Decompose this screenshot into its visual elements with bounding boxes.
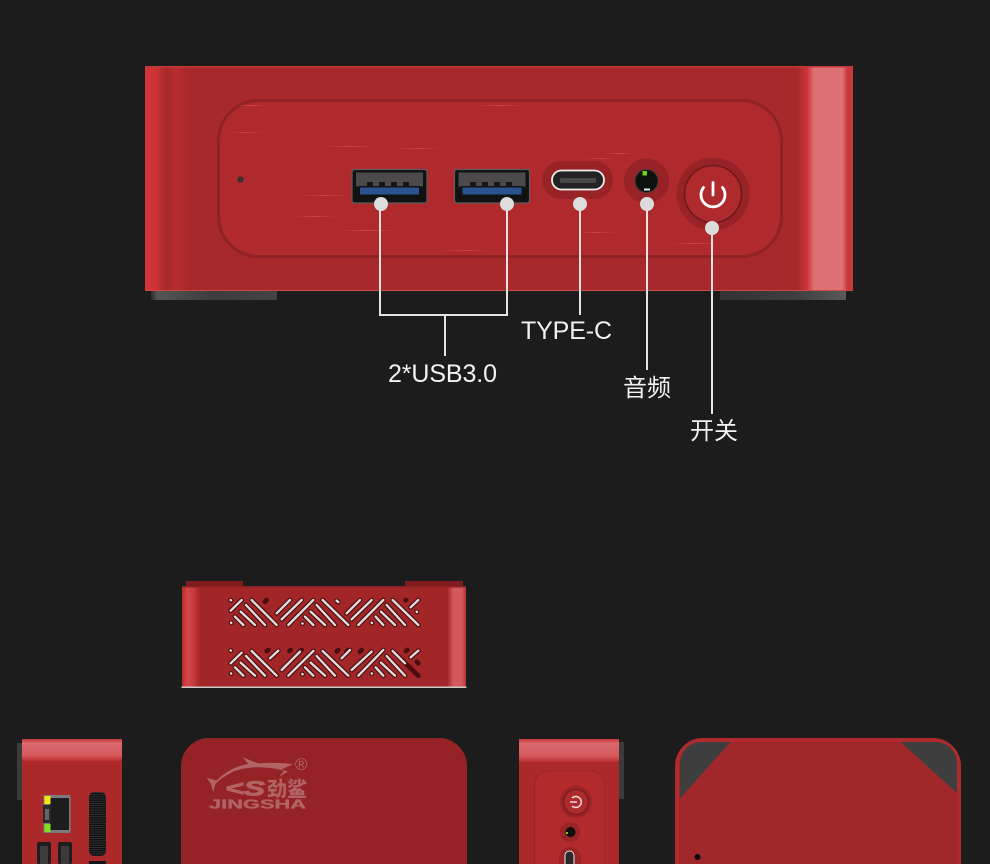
top bumps	[186, 581, 463, 587]
rubber pad right	[900, 742, 957, 793]
panel: logo face	[181, 738, 467, 864]
vent row 1	[231, 600, 418, 625]
icon: power button	[560, 786, 592, 818]
label: USB: 2*USB3.0	[388, 360, 497, 388]
logo letters: <S	[225, 778, 265, 800]
vent slots	[231, 600, 418, 676]
callout dots	[374, 197, 719, 235]
feet: front view	[151, 291, 846, 300]
callout line: audio	[646, 204, 648, 370]
registered mark: ®	[295, 755, 308, 774]
panel: top view with vents	[182, 581, 466, 688]
icon: Type-C port	[542, 161, 613, 199]
indicator hole	[237, 176, 244, 183]
recessed front panel	[218, 100, 782, 256]
icon: shark	[207, 757, 293, 792]
icon: USB port 1	[352, 170, 427, 203]
label: Type-C: TYPE-C	[521, 317, 612, 345]
callout line: Type-C	[579, 204, 581, 315]
panel: right side view	[519, 739, 624, 864]
icon: USB port 2	[454, 170, 530, 203]
icon: audio jack	[624, 158, 669, 204]
vent row 2	[231, 650, 418, 676]
icon: USB ports	[37, 842, 72, 864]
screw hole	[694, 854, 700, 860]
icon: Type-C port	[559, 847, 581, 864]
rubber pad left	[680, 742, 730, 798]
panel: left side view	[17, 739, 122, 864]
panel: bottom view	[677, 740, 959, 864]
callout line: power	[711, 228, 713, 414]
vent strip	[89, 792, 106, 856]
recessed panel	[534, 771, 604, 864]
callout lines: USB bracket	[380, 204, 507, 356]
icon: ethernet port	[43, 795, 70, 833]
logo: JINGSHA	[207, 755, 308, 812]
label: audio: 音频	[623, 375, 671, 402]
icon: power button	[676, 158, 750, 230]
label: power: 开关	[690, 418, 738, 445]
logo wordmark: JINGSHA	[209, 798, 306, 812]
logo Chinese name: 劲鲨	[267, 778, 307, 801]
panel: front view of device	[145, 66, 853, 291]
icon: audio jack	[560, 822, 580, 842]
